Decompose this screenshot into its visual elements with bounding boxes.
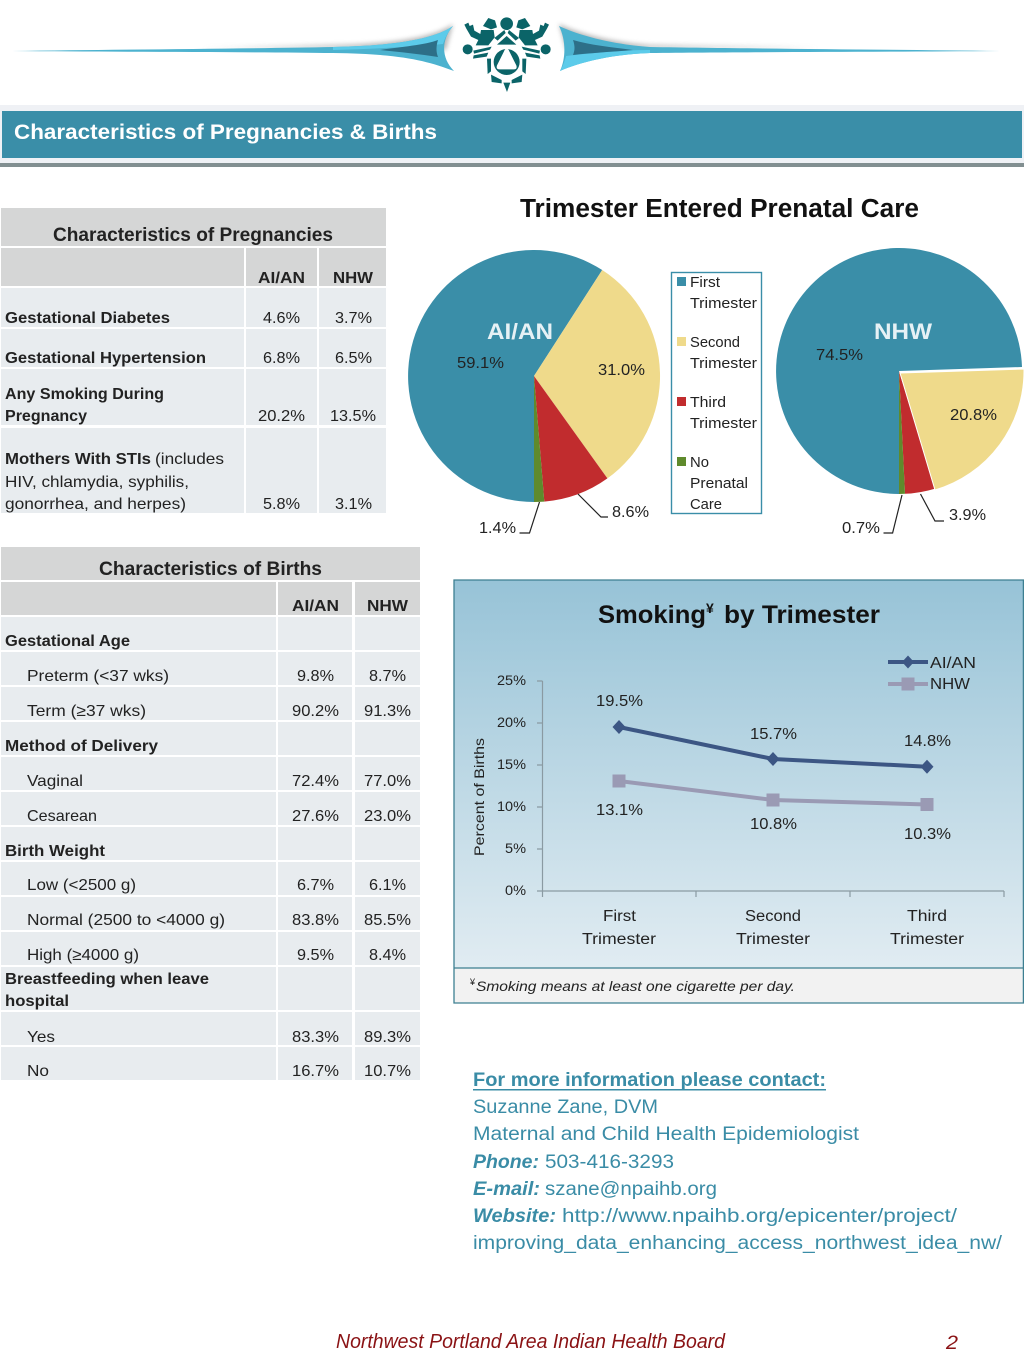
chart heading: ¥ <box>706 600 714 616</box>
x axis labels: Second <box>745 908 801 925</box>
row: preterm: Preterm (<37 wks) <box>27 668 169 685</box>
row: method of delivery <box>1 722 420 755</box>
pie label: second trimester: 31.0% <box>598 362 645 379</box>
row: gestational hypertension: 6.5% <box>335 350 372 367</box>
pie chart: AI/AN <box>408 250 660 537</box>
series: NHW: 10.3% <box>904 826 951 843</box>
y axis: 0% <box>505 882 526 898</box>
legend item: no prenatal care <box>677 455 748 513</box>
left wing <box>12 26 454 71</box>
chart legend: AI/AN <box>930 655 976 672</box>
row: yes: 83.3% <box>292 1029 339 1046</box>
legend item: no prenatal care: Prenatal <box>690 476 748 492</box>
legend item: second trimester <box>677 335 757 372</box>
x axis labels: Third <box>907 908 947 925</box>
pie label: second trimester: 20.8% <box>950 407 997 424</box>
contact heading: For more information please contact: <box>473 1070 826 1091</box>
legend item: second trimester: Trimester <box>690 356 757 372</box>
series: AI/AN: 19.5% <box>596 693 643 710</box>
x axis labels: Trimester <box>582 931 656 948</box>
row: any smoking: 13.5% <box>330 408 376 425</box>
icon: tribal figures logo <box>463 17 551 92</box>
banner heading: Characteristics of Pregnancies & Births <box>14 120 437 144</box>
table title <box>1 208 386 246</box>
page number: 2 <box>945 1333 958 1354</box>
row: mothers with STIs: 3.1% <box>335 496 372 513</box>
row: preterm: 9.8% <box>297 668 334 685</box>
row: low weight: 6.1% <box>369 877 406 894</box>
y axis: 10% <box>497 798 526 814</box>
row: yes: 89.3% <box>364 1029 411 1046</box>
row: gestational diabetes: 3.7% <box>335 310 372 327</box>
legend item: second trimester: Second <box>690 335 740 351</box>
chart heading <box>598 600 880 629</box>
row: any smoking: Pregnancy <box>5 408 87 425</box>
callout: no prenatal care: 1.4% <box>479 520 516 537</box>
column headers <box>1 248 386 287</box>
y axis title: Percent of Births <box>471 738 487 856</box>
row: mothers with STIs: HIV, chlamydia, syphilis, <box>5 474 189 491</box>
pie label: group name: AI/AN <box>487 319 553 344</box>
row: low weight: 6.7% <box>297 877 334 894</box>
header ornament <box>12 17 1000 92</box>
legend item: first trimester <box>677 275 757 312</box>
x axis labels: Trimester <box>890 931 964 948</box>
row: gestational hypertension: 6.8% <box>263 350 300 367</box>
y axis: 5% <box>505 840 526 856</box>
row: breastfeeding: Breastfeeding when leave <box>5 971 209 988</box>
row: breastfeeding: hospital <box>5 993 69 1010</box>
table title: Characteristics of Pregnancies <box>53 224 333 246</box>
right wing <box>559 26 1000 71</box>
callout: no prenatal care <box>479 502 540 537</box>
chart heading: Smoking <box>598 601 706 629</box>
contact role: Maternal and Child Health Epidemiologist <box>473 1124 860 1145</box>
row: normal weight: 85.5% <box>364 912 411 929</box>
row: term <box>1 687 420 720</box>
contact phone: Phone: <box>473 1152 539 1173</box>
organization name: Northwest Portland Area Indian Health Board <box>336 1331 726 1353</box>
table: characteristics of births <box>1 547 420 1080</box>
pie chart: NHW <box>776 248 1024 537</box>
series: NHW <box>596 774 951 843</box>
row: gestational hypertension <box>1 329 386 367</box>
section banner <box>0 105 1024 167</box>
contact website: improving_data_enhancing_access_northwest_idea_nw/ <box>473 1233 1003 1254</box>
row: high weight: High (≥4000 g) <box>27 947 139 964</box>
callout: third trimester <box>920 494 986 524</box>
row: mothers with STIs: Mothers With STIs <box>5 451 151 468</box>
chart legend <box>888 655 976 693</box>
row: mothers with STIs <box>1 428 386 513</box>
legend item: first trimester: First <box>690 275 720 291</box>
column headers: AI/AN <box>292 598 339 615</box>
footnote: ¥ <box>469 977 476 987</box>
row: yes: Yes <box>27 1029 55 1046</box>
series: AI/AN <box>596 693 951 774</box>
pie label: first trimester: 74.5% <box>816 347 863 364</box>
callout: third trimester: 3.9% <box>949 507 986 524</box>
row: any smoking: 20.2% <box>258 408 305 425</box>
logo: right figure <box>512 18 551 83</box>
row: gestational diabetes: Gestational Diabetes <box>5 310 170 327</box>
series: AI/AN: 15.7% <box>750 726 797 743</box>
contact email <box>473 1179 717 1200</box>
row: vaginal: 77.0% <box>364 773 411 790</box>
x axis labels: First <box>603 908 637 925</box>
row: preterm: 8.7% <box>369 668 406 685</box>
row: normal weight <box>1 897 420 930</box>
row: vaginal: 72.4% <box>292 773 339 790</box>
footer <box>336 1331 958 1354</box>
series: NHW: 10.8% <box>750 816 797 833</box>
row: vaginal: Vaginal <box>27 773 83 790</box>
column headers <box>1 582 420 615</box>
series: NHW: 13.1% <box>596 802 643 819</box>
row: any smoking <box>1 369 386 425</box>
chart heading: by Trimester <box>724 601 880 629</box>
row: cesarean: 27.6% <box>292 808 339 825</box>
pie label: first trimester: 59.1% <box>457 355 504 372</box>
table title: Characteristics of Births <box>99 558 322 580</box>
footnote: Smoking means at least one cigarette per day. <box>476 978 795 994</box>
contact email: E-mail: <box>473 1179 540 1200</box>
pie label: group name: NHW <box>874 319 933 344</box>
contact name: Suzanne Zane, DVM <box>473 1097 658 1118</box>
row: any smoking: Any Smoking During <box>5 386 164 403</box>
row: vaginal <box>1 757 420 790</box>
row: preterm <box>1 652 420 685</box>
row: gestational diabetes <box>1 288 386 327</box>
callout: third trimester: 8.6% <box>612 504 649 521</box>
y axis: 15% <box>497 756 526 772</box>
row: no: No <box>27 1063 49 1080</box>
row: no: 10.7% <box>364 1063 411 1080</box>
contact website: Website: <box>473 1206 556 1227</box>
series: AI/AN: 14.8% <box>904 733 951 750</box>
y axis <box>497 672 1004 898</box>
panel: smoking by trimester <box>454 580 1024 1003</box>
row: birth weight: Birth Weight <box>5 843 106 860</box>
row: mothers with STIs: (includes <box>155 451 224 468</box>
heading: trimester entered prenatal care: Trimester Entered Prenatal Care <box>520 195 919 223</box>
row: gestational age: Gestational Age <box>5 633 130 650</box>
row: mothers with STIs: 5.8% <box>263 496 300 513</box>
table: characteristics of pregnancies <box>1 208 386 513</box>
row: cesarean: Cesarean <box>27 808 97 825</box>
row: breastfeeding <box>1 967 420 1010</box>
legend item: third trimester <box>677 395 757 432</box>
callout: no prenatal care: 0.7% <box>842 520 880 537</box>
row: gestational diabetes: 4.6% <box>263 310 300 327</box>
row: term: 91.3% <box>364 703 411 720</box>
x axis labels: Trimester <box>736 931 810 948</box>
y axis: 25% <box>497 672 526 688</box>
legend item: no prenatal care: No <box>690 455 709 471</box>
legend item: no prenatal care: Care <box>690 497 722 513</box>
column headers: NHW <box>333 270 374 287</box>
row: gestational age <box>1 617 420 650</box>
row: term: Term (≥37 wks) <box>27 703 146 720</box>
row: normal weight: Normal (2500 to <4000 g) <box>27 912 225 929</box>
row: cesarean: 23.0% <box>364 808 411 825</box>
legend <box>672 272 762 514</box>
contact phone <box>473 1152 674 1173</box>
row: low weight <box>1 862 420 895</box>
row: normal weight: 83.8% <box>292 912 339 929</box>
row: no <box>1 1047 420 1080</box>
row: high weight <box>1 932 420 965</box>
contact phone: 503-416-3293 <box>545 1152 674 1173</box>
row: yes <box>1 1012 420 1046</box>
contact website: http://www.npaihb.org/epicenter/project/ <box>562 1206 958 1227</box>
contact website <box>473 1206 1003 1254</box>
line chart <box>471 655 1004 948</box>
row: high weight: 9.5% <box>297 947 334 964</box>
row: high weight: 8.4% <box>369 947 406 964</box>
table title <box>1 547 420 580</box>
row: low weight: Low (<2500 g) <box>27 877 136 894</box>
column headers: AI/AN <box>258 270 305 287</box>
contact email: szane@npaihb.org <box>545 1179 717 1200</box>
row: cesarean <box>1 792 420 825</box>
chart legend: NHW <box>930 676 971 693</box>
y axis: 20% <box>497 714 526 730</box>
callout: no prenatal care <box>842 495 902 537</box>
contact block <box>473 1070 1003 1254</box>
logo: left figure <box>463 18 502 83</box>
callout: third trimester <box>578 494 649 521</box>
row: method of delivery: Method of Delivery <box>5 738 158 755</box>
row: birth weight <box>1 827 420 860</box>
row: term: 90.2% <box>292 703 339 720</box>
row: mothers with STIs: gonorrhea, and herpes) <box>5 496 186 513</box>
column headers: NHW <box>367 598 409 615</box>
row: gestational hypertension: Gestational Hypertension <box>5 350 206 367</box>
row: no: 16.7% <box>292 1063 339 1080</box>
legend item: third trimester: Trimester <box>690 416 757 432</box>
legend item: third trimester: Third <box>690 395 726 411</box>
legend item: first trimester: Trimester <box>690 296 757 312</box>
x axis labels <box>582 908 964 948</box>
